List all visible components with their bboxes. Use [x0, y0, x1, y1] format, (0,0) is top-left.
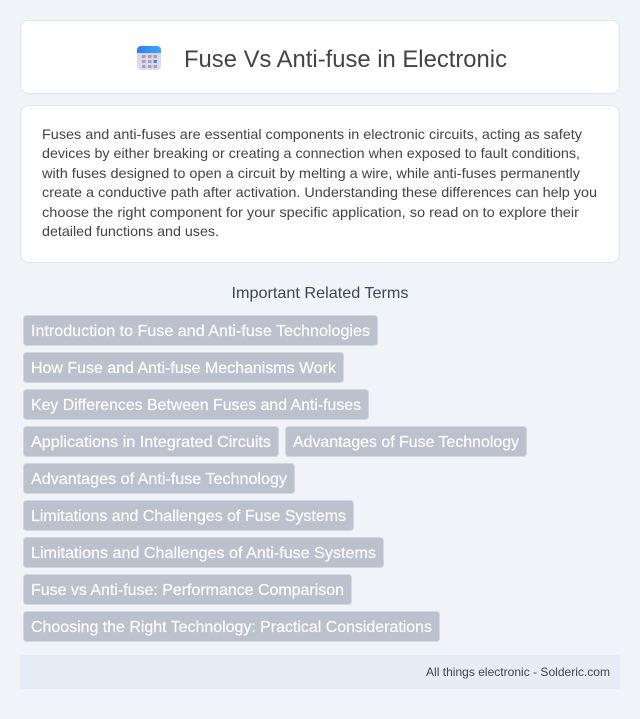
- text block: introduction paragraph: Fuses and anti-fuses are essential components in electronic circuits, acting as safety: [42, 126, 582, 142]
- text block: introduction paragraph: choose the right component for your specific application, so read on to explore their: [42, 204, 579, 220]
- tag: limitations of anti-fuse: [24, 538, 384, 568]
- tag: advantages of fuse: [286, 426, 526, 456]
- tag: key differences: Key Differences Between Fuses and Anti-fuses: [31, 397, 361, 414]
- tag: advantages of fuse: Advantages of Fuse Technology: [293, 434, 519, 451]
- panel: header: [20, 20, 620, 94]
- tag: performance comparison: [24, 574, 352, 604]
- tag: choosing technology: [24, 612, 440, 642]
- tag: limitations of anti-fuse: Limitations and Challenges of Anti-fuse Systems: [31, 545, 376, 562]
- tag: key differences: [24, 390, 368, 420]
- text block: introduction paragraph: devices by either breaking or creating a connection when exposed to fault conditions,: [42, 145, 580, 161]
- tag: introduction: Introduction to Fuse and Anti-fuse Technologies: [31, 323, 370, 340]
- tag: mechanisms: How Fuse and Anti-fuse Mechanisms Work: [31, 360, 337, 377]
- tag: limitations of fuse: Limitations and Challenges of Fuse Systems: [31, 508, 346, 525]
- tag: performance comparison: Fuse vs Anti-fuse: Performance Comparison: [31, 582, 344, 599]
- tag: choosing technology: Choosing the Right Technology: Practical Considerations: [31, 619, 432, 636]
- text block: introduction paragraph: detailed functions and uses.: [42, 223, 219, 239]
- tag: introduction: [24, 316, 378, 346]
- text block: introduction paragraph: create a conductive path after activation. Understanding these differences can help you: [42, 184, 597, 200]
- tag: applications: Applications in Integrated Circuits: [31, 434, 271, 451]
- heading: important related terms: Important Related Terms: [232, 285, 408, 302]
- tag: applications: [24, 426, 278, 456]
- icon: calendar: [137, 46, 161, 70]
- panel: introduction: [20, 106, 620, 262]
- text block: introduction paragraph: [41, 126, 597, 239]
- tag: advantages of anti-fuse: [24, 464, 294, 494]
- tag: limitations of fuse: [24, 500, 354, 530]
- footer: [20, 655, 620, 689]
- tag: advantages of anti-fuse: Advantages of Anti-fuse Technology: [31, 471, 287, 488]
- title: Fuse Vs Anti-fuse in Electronic: [184, 46, 507, 73]
- text block: introduction paragraph: with fuses designed to open a circuit by melting a wire, while anti-fuses permanently: [41, 165, 580, 181]
- footer: All things electronic - Solderic.com: [426, 665, 610, 679]
- tag: mechanisms: [24, 352, 344, 382]
